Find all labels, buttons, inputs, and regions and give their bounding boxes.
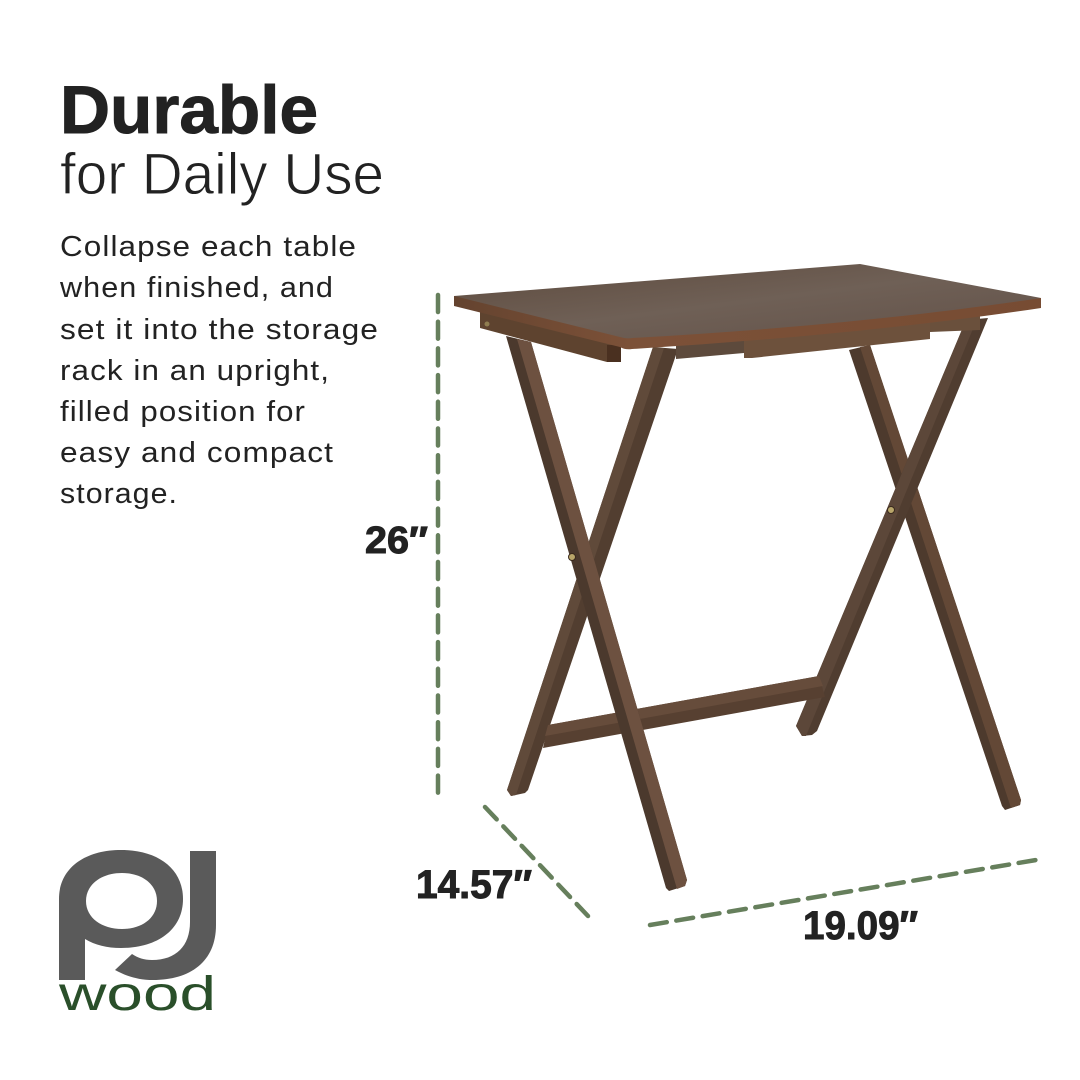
middle cross rail	[676, 340, 744, 359]
description text block: rack in an upright,	[60, 355, 330, 387]
width label: 19.09″	[803, 904, 918, 948]
description text block	[59, 231, 379, 510]
description text block: filled position for	[60, 396, 306, 428]
table top surface	[454, 264, 1041, 338]
back left leg	[507, 347, 678, 796]
logo word wood: wood	[58, 968, 216, 1021]
description text block: set it into the storage	[60, 314, 379, 346]
heading	[60, 72, 384, 207]
depth label: 14.57″	[416, 863, 532, 907]
folding table illustration	[454, 264, 1041, 891]
depth dimension line	[485, 807, 588, 916]
back right leg	[849, 345, 1021, 810]
description text block: easy and compact	[60, 437, 334, 469]
logo: PJ Wood	[58, 850, 216, 1021]
right cross rail	[930, 316, 980, 332]
description text block: when finished, and	[59, 272, 334, 304]
description text block: storage.	[60, 478, 178, 510]
width dimension line	[650, 860, 1036, 925]
logo letter p	[59, 850, 183, 980]
front right leg	[796, 318, 988, 736]
subtitle: for Daily Use: for Daily Use	[60, 142, 384, 207]
height dimension line	[436, 295, 440, 793]
front left leg	[506, 336, 687, 891]
title: Durable: Durable	[60, 72, 318, 148]
lower stretcher bar	[543, 676, 825, 748]
left support rail	[480, 308, 621, 362]
logo letter j	[115, 851, 216, 980]
table top edge	[454, 296, 1041, 349]
pivot bolts	[568, 506, 894, 560]
description text block: Collapse each table	[60, 231, 357, 263]
front tray strip	[744, 322, 930, 358]
height label: 26″	[365, 520, 428, 562]
